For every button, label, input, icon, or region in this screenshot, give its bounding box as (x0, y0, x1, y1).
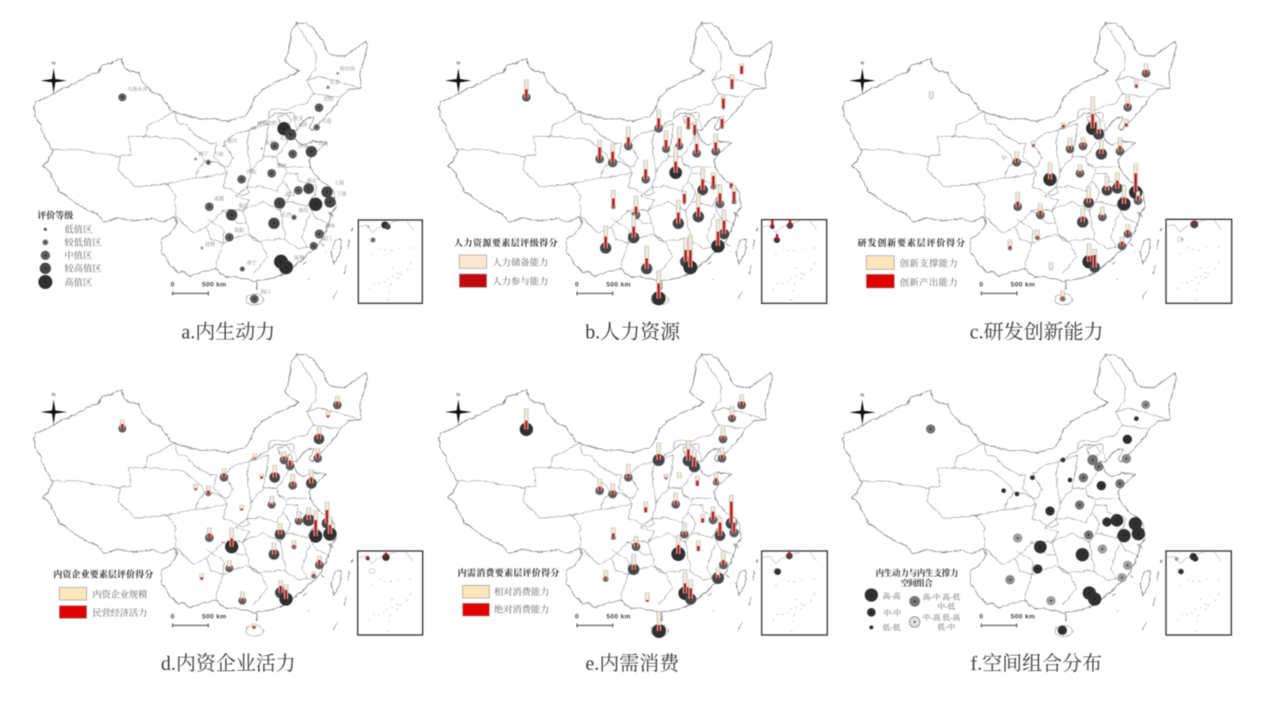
legend: domestic enterprises (53, 568, 153, 619)
map: China provinces (34, 355, 367, 637)
inset: South China Sea (358, 551, 423, 635)
circles: spatial combination classes (926, 400, 1150, 635)
compass (849, 392, 876, 425)
circles: domestic enterprise score (118, 401, 342, 629)
scale bar: 500 km (202, 614, 227, 621)
city name labels: 宁波 (337, 190, 347, 197)
legend: evaluation grade: 中值区 (64, 249, 92, 261)
scale bar: 500 km (1011, 282, 1035, 289)
map: China provinces (439, 355, 772, 637)
panel: f. 空间组合分布 (843, 355, 1231, 675)
city name labels: 南昌 (298, 207, 308, 214)
city name labels: 海口 (261, 288, 271, 295)
city name labels: 成都 (214, 196, 224, 203)
scale bar (171, 614, 227, 627)
city name labels: 兰州 (213, 151, 223, 158)
city name labels: 深圳 (294, 254, 304, 261)
legend: evaluation grade: 低值区 (64, 223, 92, 235)
legend: spatial combination (865, 568, 961, 632)
legend: spatial combination: 低-中 (937, 622, 956, 632)
legend: innovation (858, 237, 965, 288)
city name labels: 福州 (325, 222, 335, 229)
city name labels: 武汉 (285, 191, 295, 198)
legend: evaluation grade (37, 209, 102, 289)
city name labels: 西宁 (198, 150, 208, 157)
legend: evaluation grade: 评价等级 (37, 209, 73, 220)
legend: domestic consumption: 相对消费能力 (494, 586, 549, 598)
legend: domestic enterprises: 内资企业要素层评价得分 (53, 568, 153, 579)
caption: e.内需消费 (585, 652, 680, 675)
inset: South China Sea (358, 220, 422, 303)
panel: c. 研发创新能力 (843, 23, 1232, 343)
city name labels: 银川 (227, 138, 237, 145)
city name labels: 重庆 (238, 202, 248, 209)
city name labels: 厦门 (322, 235, 332, 242)
city name labels: 上海 (334, 180, 344, 187)
city name labels: 天津 (297, 122, 307, 129)
scale bar: 500 km (1011, 614, 1035, 621)
scale bar: 0 (575, 614, 579, 621)
circles: consumption score (520, 401, 746, 638)
inset: South China Sea (762, 551, 827, 635)
caption: d.内资企业活力 (161, 652, 296, 675)
city name labels: 西安 (247, 168, 257, 175)
compass: N (861, 61, 865, 67)
map: China provinces (843, 23, 1176, 305)
circles: human resources score (522, 72, 743, 305)
legend: human resources (454, 237, 558, 287)
city name labels: 长沙 (282, 212, 293, 219)
scale bar: 500 km (606, 282, 631, 289)
compass: N (457, 392, 461, 398)
legend: spatial combination: 空间组合 (901, 578, 933, 588)
caption: f.空间组合分布 (971, 652, 1102, 675)
thermometer bars (526, 394, 742, 631)
city name labels: 南京 (307, 177, 317, 184)
city name labels: 呼和浩特 (257, 120, 277, 127)
compass (40, 61, 67, 93)
city name labels: 南宁 (247, 260, 257, 267)
city name labels: 大连 (322, 118, 332, 125)
scale bar: 500 km (202, 282, 227, 289)
thermometer bars (526, 63, 742, 298)
compass: N (52, 392, 56, 398)
city name labels: 长春 (330, 79, 340, 86)
city name labels: 沈阳 (323, 96, 333, 103)
city name labels: 贵阳 (234, 227, 244, 234)
compass (445, 392, 472, 425)
legend: innovation: 创新支撑能力 (900, 258, 958, 270)
city name labels: 乌鲁木齐 (127, 86, 147, 93)
graduated circles by evaluation grade (118, 72, 339, 303)
scale bar (575, 282, 631, 295)
legend: spatial combination: 中-低 (937, 601, 956, 611)
legend: spatial combination: 高-高 (883, 590, 901, 600)
city name labels: 郑州 (277, 162, 287, 169)
compass: N (52, 61, 56, 67)
scale bar: 0 (171, 614, 175, 621)
legend: human resources: 人力储备能力 (492, 256, 548, 268)
panel: d. 内资企业活力 (34, 355, 423, 675)
legend: spatial combination: 中-高 低-高 (923, 612, 961, 622)
caption: b.人力资源 (585, 320, 681, 343)
city name labels: 昆明 (205, 241, 215, 248)
compass: N (861, 392, 865, 398)
legend: domestic consumption: 绝对消费能力 (494, 604, 549, 616)
scale bar (575, 614, 631, 627)
inset: South China Sea (1166, 219, 1232, 303)
legend: domestic consumption: 内需消费要素层评价得分 (458, 567, 559, 578)
city name labels: 石家庄 (280, 135, 295, 142)
scale bar: 0 (979, 614, 983, 621)
panel: a. 内生动力 (34, 23, 422, 343)
city name labels: 哈尔滨 (340, 65, 355, 72)
legend: innovation: 创新产出能力 (900, 276, 958, 288)
city name labels: 太原 (265, 139, 275, 146)
legend: human resources: 人力参与能力 (492, 275, 548, 287)
circles: innovation score (930, 69, 1150, 302)
compass (445, 61, 472, 93)
map: China provinces (439, 23, 772, 305)
scale bar: 0 (979, 282, 983, 289)
legend: spatial combination: 中-中 (883, 607, 902, 617)
city name labels (127, 65, 355, 295)
city name labels: 济南 (298, 142, 308, 149)
legend: spatial combination: 低-低 (883, 623, 901, 632)
panel: b. 人力资源 (439, 23, 827, 343)
legend: domestic enterprises: 内资企业规模 (92, 588, 148, 600)
legend: innovation: 研发创新要素层评价得分 (858, 237, 965, 248)
scale bar (171, 282, 227, 295)
caption: c.研发创新能力 (970, 320, 1104, 343)
legend: evaluation grade: 较低值区 (64, 236, 102, 248)
scale bar (979, 614, 1035, 627)
legend: spatial combination: 内生动力与内生支撑力 (876, 568, 958, 578)
caption: a.内生动力 (181, 320, 275, 343)
map: China provinces (843, 355, 1176, 637)
legend: human resources: 人力资源要素层评级得分 (454, 237, 558, 248)
inset: South China Sea (1166, 551, 1231, 635)
scale bar: 500 km (606, 614, 631, 621)
legend: evaluation grade: 高值区 (64, 276, 92, 288)
inset: South China Sea (762, 220, 827, 303)
legend: evaluation grade: 较高值区 (64, 263, 102, 275)
thermometer bars (122, 396, 337, 628)
scale bar: 0 (171, 282, 175, 289)
legend: domestic consumption (458, 567, 559, 616)
city name labels: 青岛 (318, 140, 328, 147)
panel: e. 内需消费 (439, 355, 827, 675)
thermometer bars (931, 63, 1146, 299)
scale bar (979, 282, 1035, 295)
compass (40, 392, 67, 425)
city name labels: 北京 (293, 115, 303, 122)
compass (849, 61, 876, 93)
legend: domestic enterprises: 民营经济活力 (92, 607, 147, 619)
map: China provinces (34, 23, 367, 305)
compass: N (457, 61, 461, 67)
legend: spatial combination: 高-中 高-低 (923, 591, 961, 601)
scale bar: 0 (575, 282, 579, 289)
